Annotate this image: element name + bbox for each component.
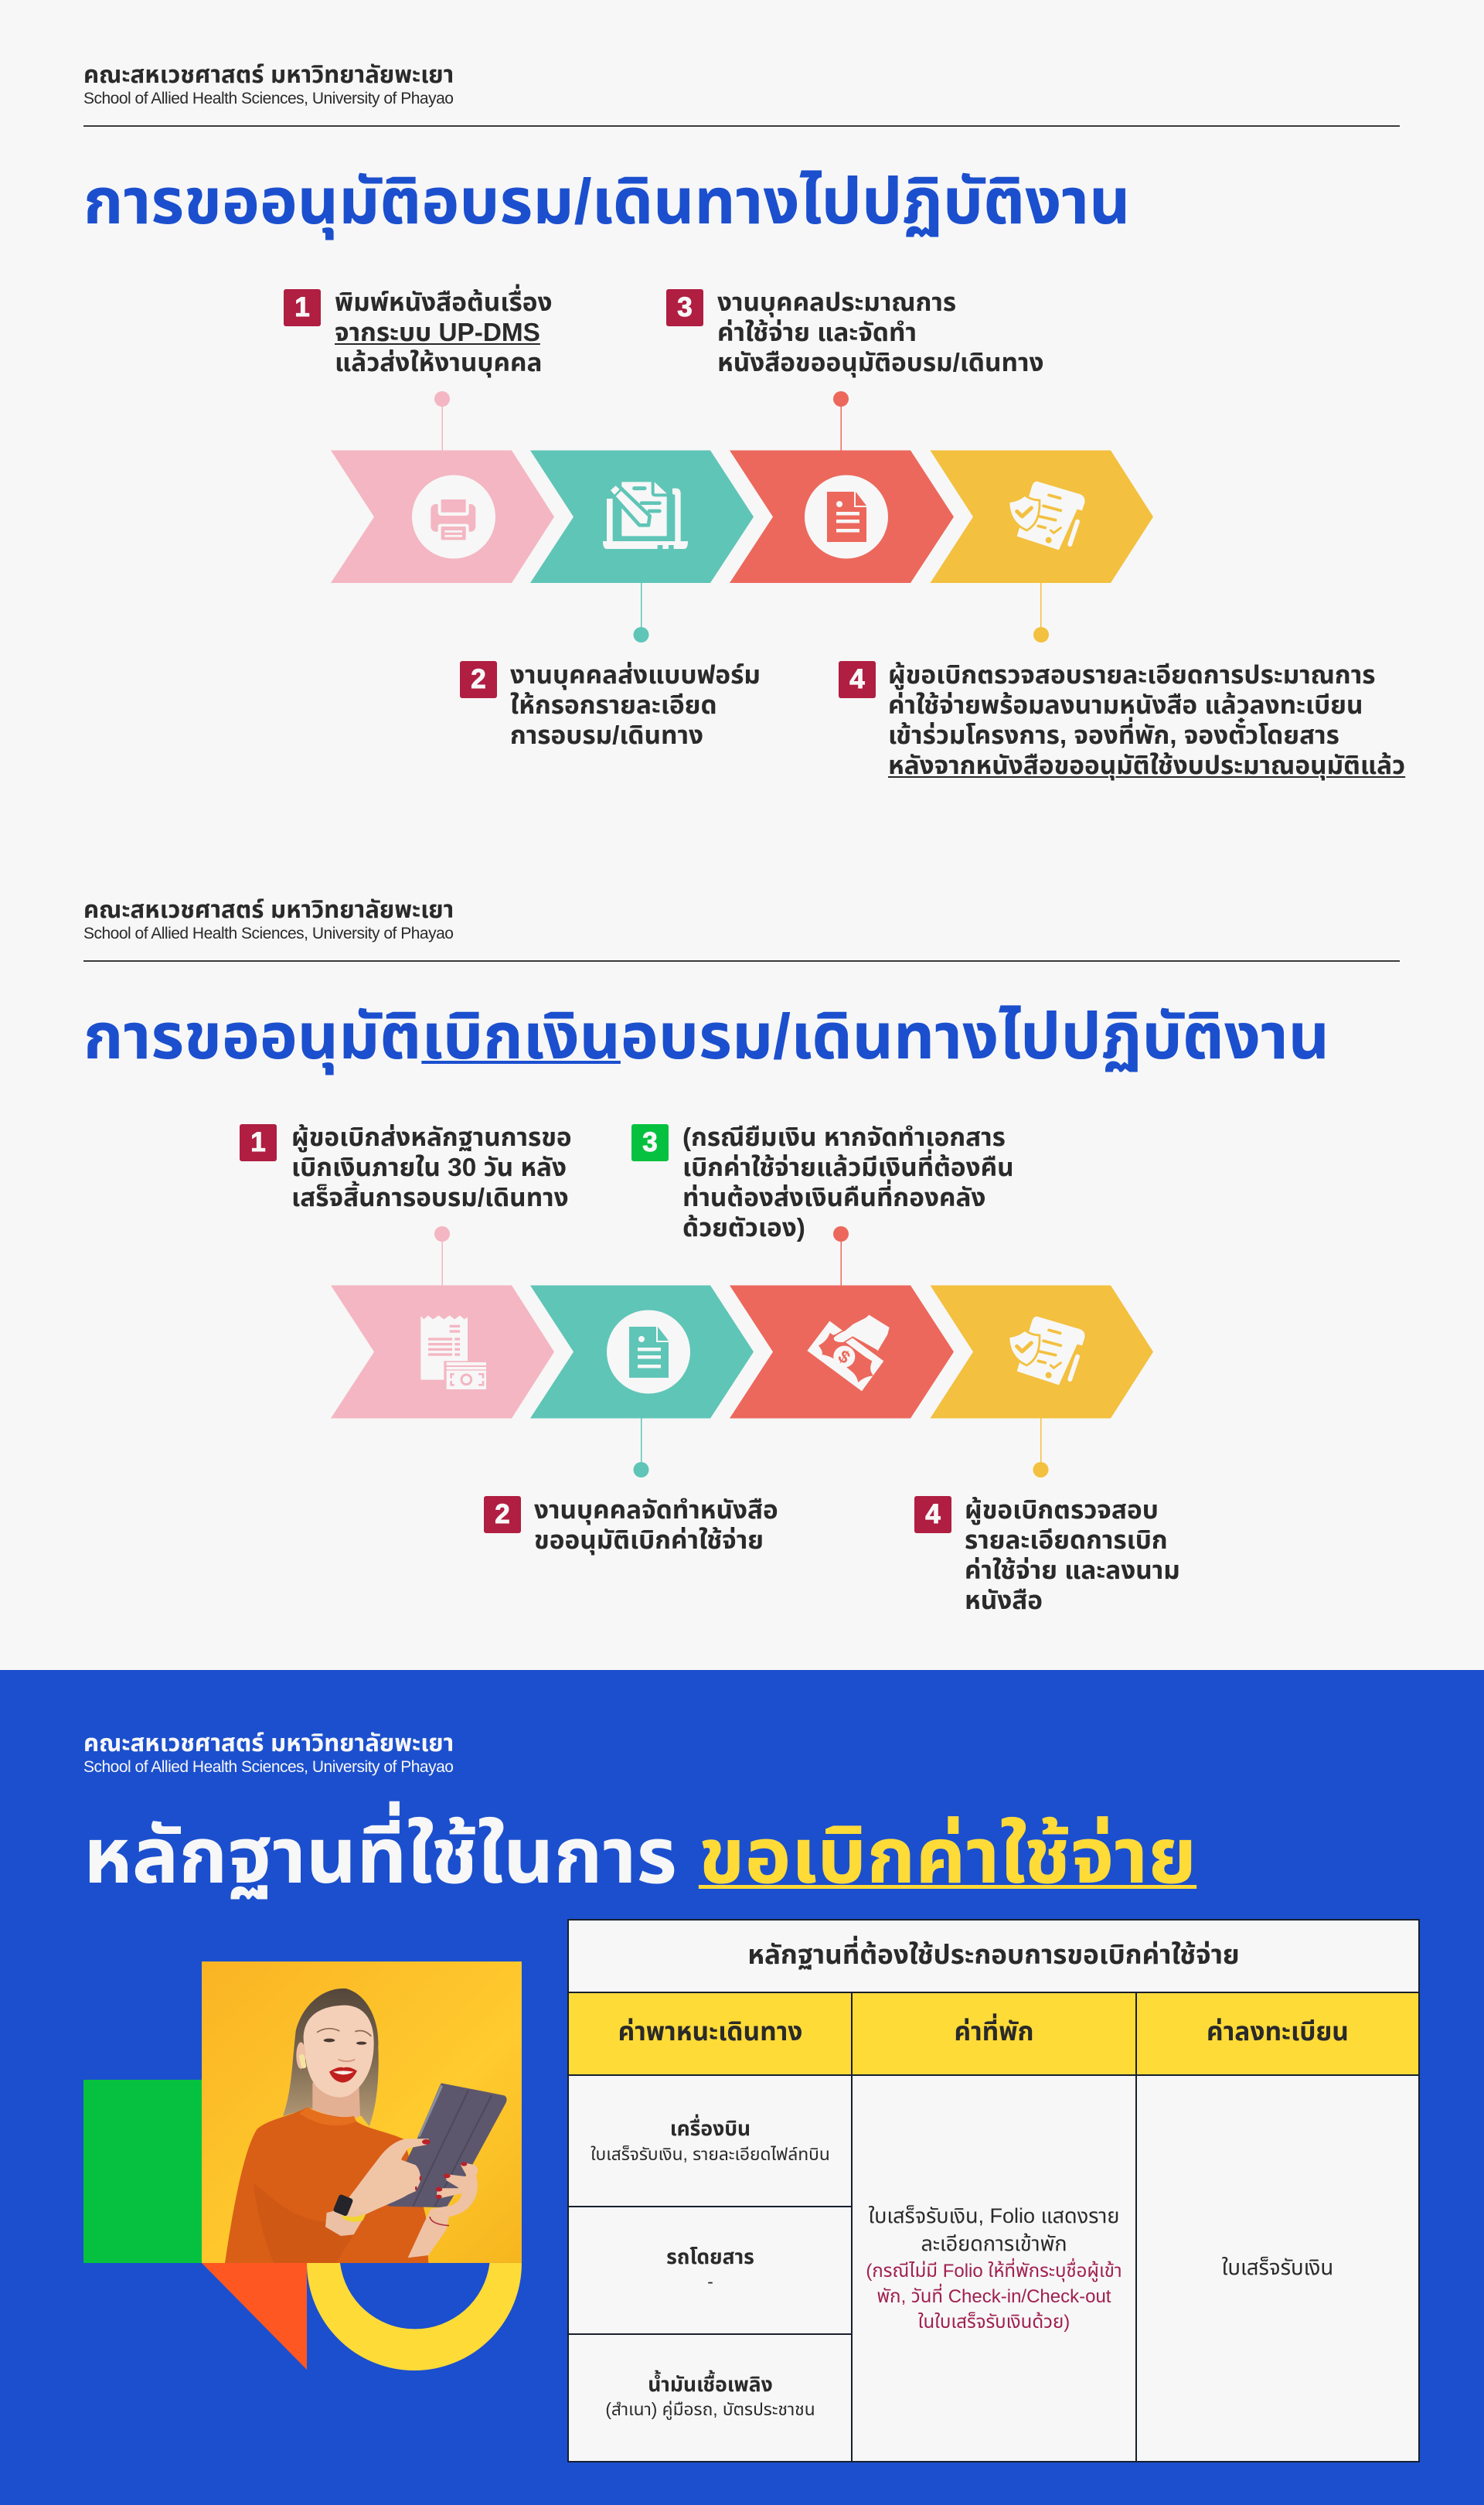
title: การขออนุมัติเบิกเงินอบรม/เดินทางไปปฏิบัติงาน — [83, 1001, 1329, 1072]
icon: shield and checklist — [1009, 482, 1085, 550]
step 3: (กรณียืมเงิน หากจัดทำเอกสาร — [682, 1123, 1006, 1152]
cell: bus — [569, 2206, 852, 2333]
icon: hand with banknote: $ — [835, 1345, 854, 1368]
arrow: teal — [530, 450, 754, 583]
cell: fuel: น้ำมันเชื้อเพลิง — [648, 2373, 773, 2396]
step 4: ค่าใช้จ่าย และลงนาม — [965, 1556, 1180, 1585]
title: การขออนุมัติอบรม/เดินทางไปปฏิบัติงาน — [83, 166, 1130, 237]
header: institution name: คณะสหเวชศาสตร์ มหาวิทยาลัยพะเยา — [83, 1730, 454, 1757]
step 4: ผู้ขอเบิกตรวจสอบ — [965, 1496, 1159, 1525]
icon: printer — [412, 475, 495, 558]
cell: registration evidence: ใบเสร็จรับเงิน — [1222, 2255, 1333, 2279]
cell: bus: รถโดยสาร — [666, 2245, 754, 2268]
header: institution name — [83, 61, 454, 107]
cell: fuel: (สำเนา) คู่มือรถ, บัตรประชาชน — [605, 2399, 815, 2419]
connector: step 3 — [833, 1226, 849, 1287]
table: required documents — [567, 1919, 1420, 2462]
step 4: 4 — [925, 1499, 941, 1529]
step 2 — [460, 661, 761, 750]
step 1 — [240, 1123, 572, 1212]
step 4: หนังสือ — [965, 1586, 1043, 1615]
connector: step 1 — [434, 1226, 450, 1287]
step 1: 1 — [294, 292, 310, 322]
cell: accommodation evidence: ใบเสร็จรับเงิน, Folio แสดงราย — [869, 2204, 1119, 2227]
step 2: 2 — [471, 664, 486, 694]
step 2 — [484, 1496, 778, 1556]
arrow: red — [730, 1285, 954, 1418]
step 3: ท่านต้องส่งเงินคืนที่กองคลัง — [682, 1184, 985, 1212]
photo collage — [83, 1961, 522, 2370]
step 4 — [914, 1496, 1180, 1615]
process arrows with icons — [331, 391, 1153, 642]
step 3: หนังสือขออนุมัติอบรม/เดินทาง — [717, 349, 1043, 377]
header: institution name: คณะสหเวชศาสตร์ มหาวิทยาลัยพะเยา — [83, 896, 454, 923]
step 1: เบิกเงินภายใน 30 วัน หลัง — [291, 1154, 567, 1182]
step 1: ผู้ขอเบิกส่งหลักฐานการขอ — [291, 1123, 572, 1152]
header: institution name: School of Allied Health Sciences, University of Phayao — [83, 1758, 453, 1776]
column: accommodation: ค่าที่พัก — [954, 2018, 1034, 2047]
photo: woman with tablet — [202, 1961, 522, 2263]
icon: document and pencil — [603, 482, 688, 549]
step 1 — [284, 284, 552, 377]
step 4: ผู้ขอเบิกตรวจสอบรายละเอียดการประมาณการ — [888, 661, 1375, 690]
panel: required evidence — [0, 1670, 1484, 2505]
header: institution name — [83, 1730, 454, 1776]
step 2: ขออนุมัติเบิกค่าใช้จ่าย — [534, 1526, 764, 1555]
cell: airplane — [591, 2114, 830, 2164]
arrow: pink — [331, 450, 554, 583]
panel: expense claim approval — [83, 896, 1329, 1615]
cell: accommodation evidence: ละเอียดการเข้าพัก — [921, 2232, 1067, 2255]
cell: fuel — [569, 2333, 852, 2462]
cell: bus: - — [707, 2272, 713, 2292]
step 3 — [631, 1123, 1014, 1242]
connector: step 4 — [1033, 1416, 1048, 1477]
step 3: 3 — [642, 1127, 658, 1157]
icon: document in circle — [805, 475, 888, 558]
icon: receipt and banknote — [420, 1315, 486, 1389]
step 4: เข้าร่วมโครงการ, จองที่พัก, จองตั๋วโดยสาร — [888, 721, 1339, 750]
connector: step 1 — [434, 391, 450, 452]
header: institution name — [83, 896, 454, 942]
arrow: pink — [331, 1285, 554, 1418]
title: หลักฐานที่ใช้ในการ ขอเบิกค่าใช้จ่าย — [83, 1813, 1196, 1900]
step 3: ด้วยตัวเอง) — [682, 1214, 805, 1242]
header: institution name: School of Allied Health Sciences, University of Phayao — [83, 925, 453, 942]
step 1: พิมพ์หนังสือต้นเรื่อง — [335, 288, 552, 317]
cell: accommodation evidence: พัก, วันที่ Check-in/Check-out — [876, 2286, 1111, 2307]
step 3: 3 — [677, 292, 693, 322]
step 1: จากระบบ UP-DMS — [335, 319, 540, 347]
shape: yellow half ring — [307, 2263, 522, 2370]
arrow: teal — [530, 1285, 754, 1418]
step 2: 2 — [495, 1499, 510, 1529]
connector: step 2 — [634, 581, 649, 642]
step 3: งานบุคคลประมาณการ — [717, 288, 956, 317]
step 1: 1 — [250, 1127, 266, 1157]
icon: document in circle — [607, 1310, 690, 1393]
column: travel: ค่าพาหนะเดินทาง — [618, 2018, 802, 2047]
connector: step 4 — [1033, 581, 1049, 642]
header: institution name: School of Allied Health Sciences, University of Phayao — [83, 90, 453, 107]
cell: airplane: ใบเสร็จรับเงิน, รายละเอียดไฟล์ทบิน — [591, 2144, 830, 2164]
shape: green block — [83, 2080, 202, 2263]
arrow: yellow — [931, 1285, 1153, 1418]
cell: accommodation evidence: ในใบเสร็จรับเงินด้วย) — [918, 2312, 1070, 2333]
step 4: รายละเอียดการเบิก — [965, 1526, 1168, 1555]
cell: accommodation evidence — [851, 2076, 1135, 2462]
step 2: ให้กรอกรายละเอียด — [510, 691, 717, 720]
icon: hand with banknote — [807, 1315, 890, 1391]
divider rule 1 — [83, 125, 1400, 127]
cell: airplane: เครื่องบิน — [670, 2117, 751, 2140]
divider rule 2 — [83, 960, 1400, 962]
icon: shield and checklist — [1009, 1317, 1085, 1385]
step 4: ค่าใช้จ่ายพร้อมลงนามหนังสือ แล้วลงทะเบียน — [888, 691, 1363, 720]
process arrows with icons — [331, 1226, 1153, 1477]
connector: step 2 — [634, 1416, 649, 1477]
connector: step 3 — [833, 391, 849, 452]
step 2: งานบุคคลส่งแบบฟอร์ม — [510, 661, 761, 690]
header row — [569, 1992, 1418, 2076]
step 1: แล้วส่งให้งานบุคคล — [335, 349, 542, 377]
cell: accommodation evidence: (กรณีไม่มี Folio ให้ที่พักระบุชื่อผู้เข้า — [866, 2261, 1122, 2282]
column: registration — [1135, 1993, 1418, 2074]
cell: registration evidence — [1135, 2076, 1418, 2462]
shape: orange triangle — [202, 2263, 307, 2370]
header: institution name: คณะสหเวชศาสตร์ มหาวิทยาลัยพะเยา — [83, 61, 454, 88]
column: accommodation — [851, 1993, 1135, 2074]
panel: travel training approval — [83, 61, 1405, 781]
column: registration: ค่าลงทะเบียน — [1207, 2018, 1349, 2047]
step 2: การอบรม/เดินทาง — [510, 721, 703, 750]
table title: หลักฐานที่ต้องใช้ประกอบการขอเบิกค่าใช้จ่าย — [747, 1940, 1240, 1970]
step 4 — [839, 661, 1405, 781]
step 1: เสร็จสิ้นการอบรม/เดินทาง — [291, 1184, 569, 1212]
step 2: งานบุคคลจัดทำหนังสือ — [534, 1496, 778, 1525]
arrow: red — [730, 450, 954, 583]
step 4: 4 — [849, 664, 865, 694]
step 3 — [666, 288, 1043, 377]
arrow: yellow — [931, 450, 1153, 583]
step 3: เบิกค่าใช้จ่ายแล้วมีเงินที่ต้องคืน — [682, 1154, 1014, 1182]
step 4: หลังจากหนังสือขออนุมัติใช้งบประมาณอนุมัติแล้ว — [888, 752, 1405, 780]
step 3: ค่าใช้จ่าย และจัดทำ — [717, 319, 917, 347]
